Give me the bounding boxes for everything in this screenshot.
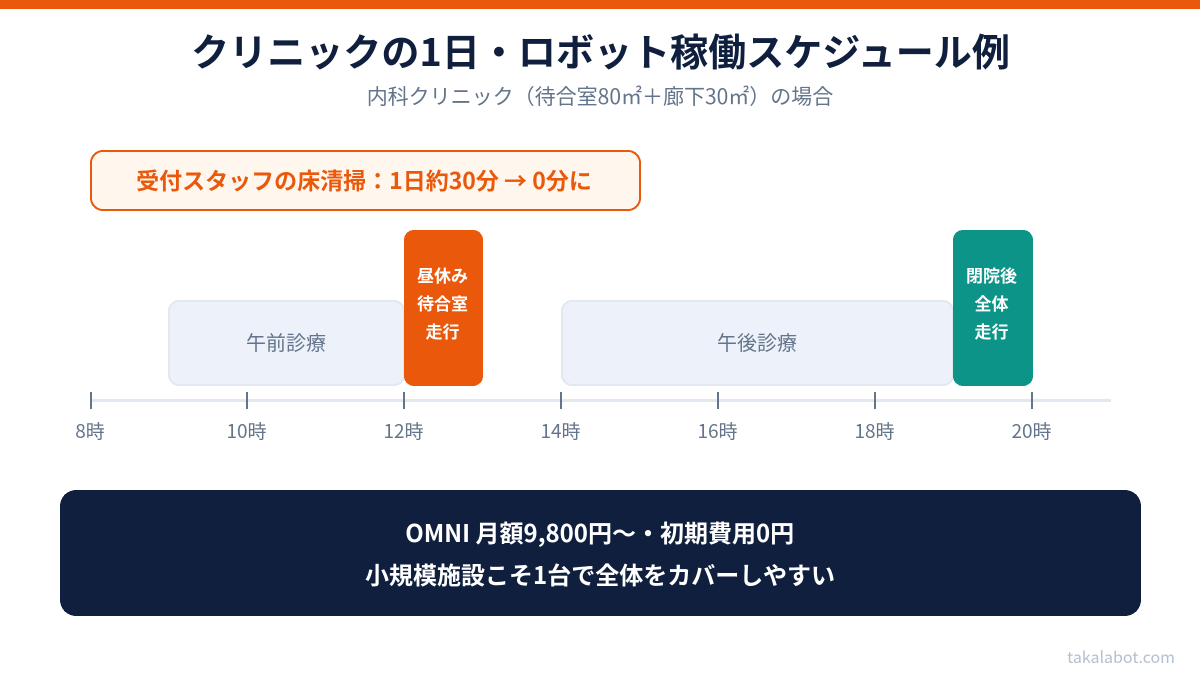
block: after closing full run: 走行: [974, 318, 1008, 343]
title: クリニックの1日・ロボット稼働スケジュール例: [191, 22, 1010, 77]
block: afternoon clinic hours: [562, 301, 953, 385]
hour labels: 18時: [854, 417, 895, 444]
subtitle: 内科クリニック（待合室80㎡＋廊下30㎡）の場合: [367, 81, 833, 111]
hour labels: 8時: [75, 417, 105, 444]
block: after closing full run: [953, 230, 1033, 386]
block: morning clinic hours: 午前診療: [246, 327, 326, 356]
hour labels: 14時: [540, 417, 581, 444]
callout: floor cleaning time saved: [91, 151, 640, 210]
block: after closing full run: 閉院後: [966, 262, 1017, 287]
hour labels: 16時: [697, 417, 738, 444]
block: lunch break waiting room run: 昼休み: [417, 262, 468, 287]
hour labels: 12時: [383, 417, 424, 444]
tick marks: [90, 392, 1033, 409]
hour labels: 20時: [1011, 417, 1052, 444]
block: lunch break waiting room run: [404, 230, 483, 386]
banner: pricing message: [60, 490, 1141, 616]
banner: pricing message: OMNI 月額9,800円〜・初期費用0円: [405, 514, 794, 549]
block: after closing full run: 全体: [974, 290, 1008, 315]
top accent bar: [0, 0, 1200, 9]
source credit: takalabot.com: [1067, 644, 1175, 668]
hour labels: 10時: [226, 417, 267, 444]
timeline axis: [75, 392, 1111, 444]
block: morning clinic hours: [169, 301, 404, 385]
banner: pricing message: 小規模施設こそ1台で全体をカバーしやすい: [365, 556, 835, 591]
block: lunch break waiting room run: 走行: [426, 318, 460, 343]
block: lunch break waiting room run: 待合室: [417, 290, 468, 315]
callout: floor cleaning time saved: 受付スタッフの床清掃：1日約30分 → 0分に: [136, 162, 592, 196]
hour labels: [75, 417, 1052, 444]
block: afternoon clinic hours: 午後診療: [717, 327, 797, 356]
